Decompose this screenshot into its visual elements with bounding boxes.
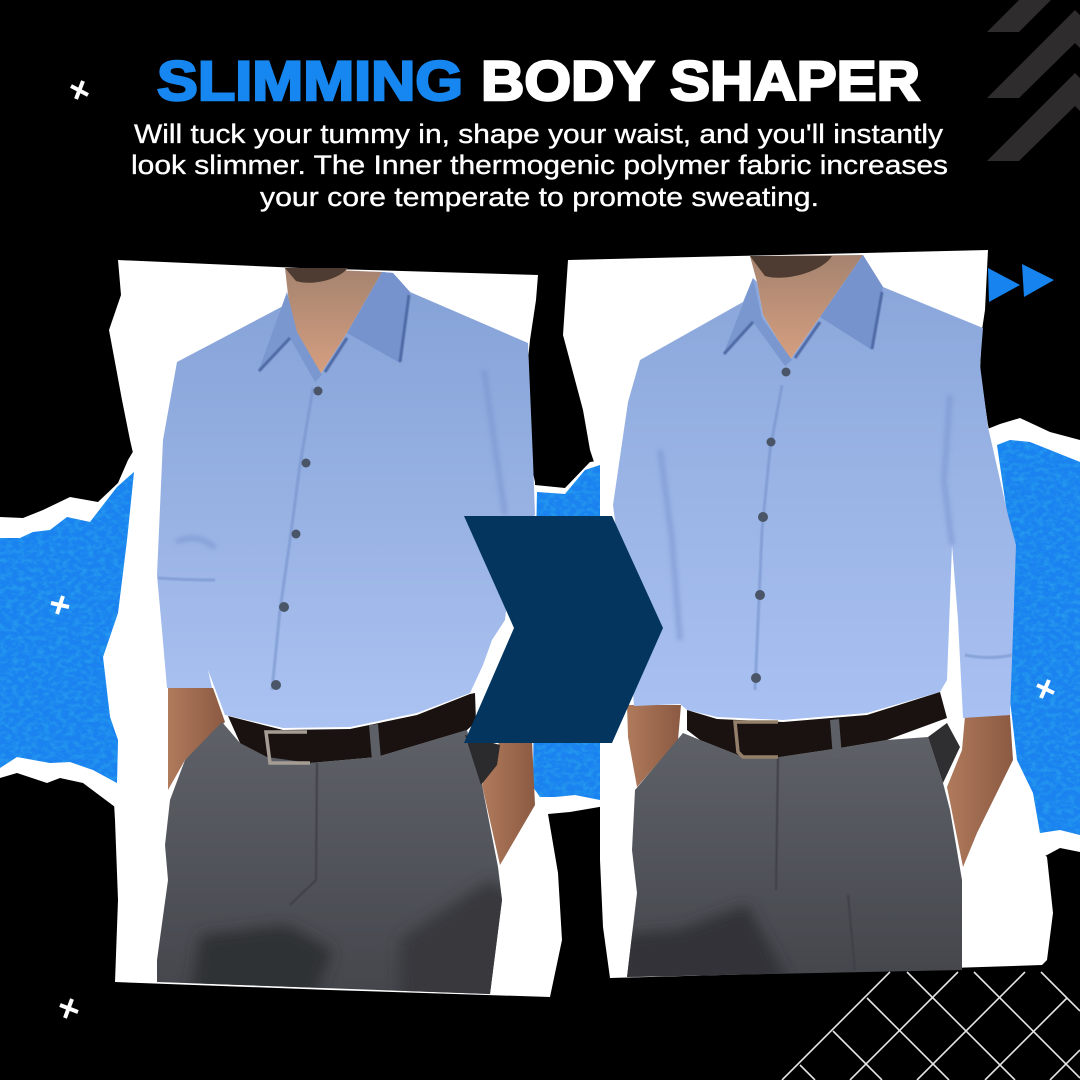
left collar — [258, 292, 322, 382]
beard shadow — [285, 268, 348, 283]
buttons — [751, 368, 790, 683]
buttons — [271, 386, 322, 690]
collar shadow — [724, 292, 882, 358]
description text: look slimmer. The Inner thermogenic polymer fabric increases — [131, 150, 948, 180]
dark side pocket — [928, 723, 960, 783]
left collar — [723, 278, 792, 366]
trousers — [627, 733, 962, 977]
description text: your core temperate to promote sweating. — [260, 182, 819, 212]
icon: blue double triangle — [988, 264, 1054, 302]
forearm, figure left — [168, 688, 225, 790]
forearm, figure right — [947, 715, 1013, 867]
right blue textured strip — [997, 440, 1080, 835]
torn white bands behind the panels — [0, 418, 1080, 860]
left blue textured strip — [0, 472, 134, 783]
belt — [228, 693, 476, 763]
left white torn paper — [108, 260, 562, 997]
panel: after photo, right — [613, 255, 1016, 990]
right white torn paper — [563, 250, 1053, 978]
middle blue textured strip — [533, 465, 600, 800]
belt loop — [369, 724, 381, 761]
shirt shading — [660, 385, 1012, 690]
hand, figure right — [482, 740, 535, 865]
belt — [687, 692, 947, 757]
belt buckle — [735, 722, 778, 757]
neck — [750, 255, 863, 360]
shirt shading — [158, 370, 505, 690]
trousers — [157, 722, 502, 994]
panel: before photo, left — [157, 268, 535, 1010]
trouser shadows — [620, 757, 855, 990]
forearm, figure left — [627, 705, 681, 787]
dark side pocket — [465, 735, 500, 785]
belt loop — [830, 719, 842, 758]
right collar — [347, 272, 410, 363]
title: highlighted word: SLIMMING — [157, 49, 463, 112]
title: remaining words: BODY SHAPER — [481, 49, 920, 112]
arrow: before to after chevron — [464, 516, 663, 743]
trouser shadows — [188, 762, 502, 994]
neck — [285, 268, 382, 375]
shirt body — [613, 255, 1016, 720]
description text — [131, 119, 948, 212]
belt buckle — [266, 732, 310, 763]
description text: Will tuck your tummy in, shape your waist, and you'll instantly — [134, 119, 944, 149]
shirt body — [157, 272, 535, 728]
chevron decoration, top right — [987, 0, 1080, 161]
collar shadow — [259, 295, 409, 372]
decorative lattice, bottom right — [782, 972, 1080, 1080]
right collar — [820, 255, 883, 350]
beard shadow — [750, 256, 832, 278]
